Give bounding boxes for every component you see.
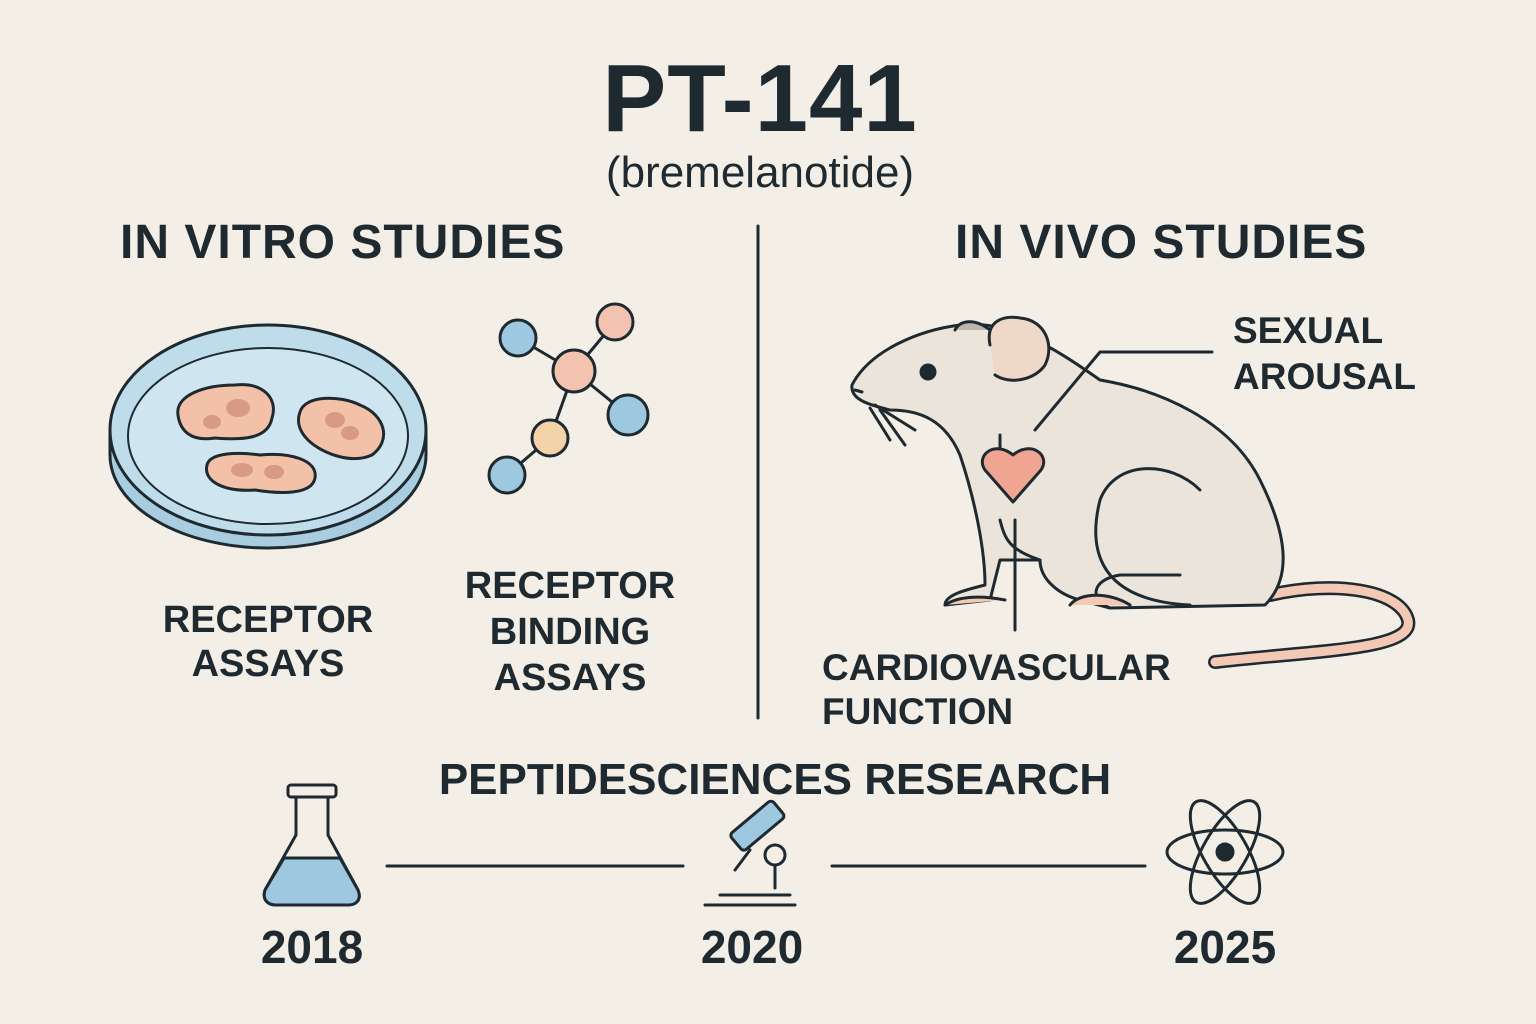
label: receptor binding assays bbox=[465, 565, 675, 699]
label: sexual arousal: AROUSAL bbox=[1233, 356, 1416, 397]
label: receptor binding assays: RECEPTOR bbox=[465, 565, 675, 607]
icon: atom bbox=[1167, 791, 1283, 913]
title: PT-141 bbox=[602, 45, 918, 152]
label: receptor binding assays: BINDING bbox=[490, 611, 650, 653]
label: receptor assays bbox=[163, 599, 373, 685]
icon: rat bbox=[852, 317, 1408, 662]
subtitle: (bremelanotide) bbox=[606, 148, 914, 197]
icon: flask bbox=[264, 785, 359, 905]
icon: microscope bbox=[705, 800, 795, 905]
heading: in vitro: IN VITRO STUDIES bbox=[120, 216, 565, 269]
heading: peptidesciences research: PEPTIDESCIENCES RESEARCH bbox=[439, 755, 1111, 804]
year 2020: 2020 bbox=[701, 921, 803, 973]
label: sexual arousal bbox=[1233, 310, 1416, 397]
label: cardiovascular function: FUNCTION bbox=[822, 691, 1013, 732]
label: cardiovascular function bbox=[822, 647, 1171, 732]
label: receptor assays: RECEPTOR bbox=[163, 599, 373, 641]
label: sexual arousal: SEXUAL bbox=[1233, 310, 1383, 351]
year 2025: 2025 bbox=[1174, 921, 1276, 973]
timeline lines bbox=[387, 864, 1145, 868]
label: receptor binding assays: ASSAYS bbox=[494, 657, 646, 699]
label: receptor assays: ASSAYS bbox=[192, 643, 344, 685]
label: cardiovascular function: CARDIOVASCULAR bbox=[822, 647, 1171, 688]
heading: in vivo: IN VIVO STUDIES bbox=[955, 216, 1367, 269]
year 2018: 2018 bbox=[261, 921, 363, 973]
icon: molecule bbox=[489, 304, 648, 493]
icon: petri dish bbox=[110, 325, 426, 548]
